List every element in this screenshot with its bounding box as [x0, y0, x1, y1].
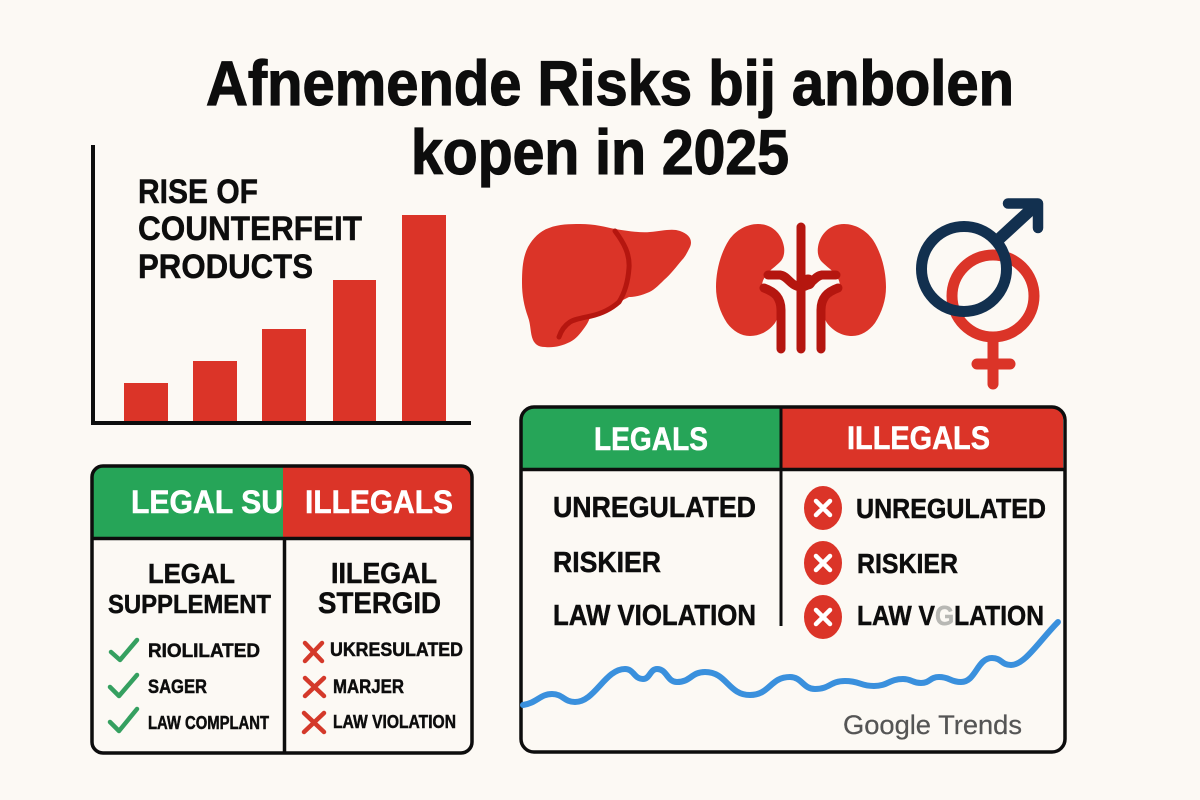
red header: [283, 467, 471, 538]
green header label: LEGALS: [594, 421, 708, 457]
panel frame: [521, 407, 1065, 752]
trend line: [523, 622, 1058, 705]
illegal column: LAW VIOLATION: [333, 712, 456, 732]
chart heading: RISE OF: [138, 173, 258, 211]
green header: [522, 408, 781, 469]
chart heading: [138, 173, 362, 286]
legal column: SAGER: [148, 677, 207, 698]
legal column list: LAW VIOLATION: [553, 600, 756, 632]
red header label: ILLEGALS: [305, 484, 453, 520]
red header: [781, 408, 1063, 469]
panel frame: [92, 466, 472, 753]
male symbol: [922, 204, 1038, 312]
legal column list: RISKIER: [553, 547, 661, 579]
green check marks: [110, 640, 137, 731]
legal column: LAW COMPLANT: [148, 713, 269, 733]
blood vessels and ureters: [764, 227, 838, 349]
illegal column list: RISKIER: [857, 548, 958, 579]
green header: [93, 467, 283, 538]
female symbol: [952, 255, 1034, 384]
liver lobe line: [559, 231, 629, 337]
illegal column: IILEGAL: [331, 558, 437, 590]
red cross marks: [304, 643, 324, 732]
panel: counterfeit bar chart: [93, 145, 471, 423]
trend source label: Google Trends: [843, 710, 1022, 740]
title: kopen in 2025: [411, 118, 789, 188]
chart heading: COUNTERFEIT: [138, 210, 362, 248]
legal column list: UNREGULATED: [553, 492, 756, 524]
title: [206, 49, 1014, 188]
chart bars: [124, 215, 446, 422]
icon: liver: [522, 224, 691, 347]
red header label: ILLEGALS: [847, 420, 990, 456]
chart axes: [93, 145, 471, 423]
green header label: LEGAL SU: [131, 484, 283, 520]
illegal column: [318, 558, 463, 732]
right kidney: [818, 224, 886, 336]
title: Afnemende Risks bij anbolen: [206, 49, 1014, 119]
icon: gender symbols: [922, 204, 1038, 384]
illegal column list: UNREGULATED: [856, 493, 1046, 524]
legal column: RIOLILATED: [148, 641, 260, 662]
legal column: SUPPLEMENT: [108, 589, 271, 619]
panel: legal supplement vs illegal steroid: [92, 466, 472, 753]
red cross badges: [804, 486, 842, 639]
legal column: [108, 558, 271, 733]
legal column list: [553, 492, 756, 632]
illegal column list: LAW VGLATION: [857, 600, 1044, 631]
illegal column list: [856, 493, 1046, 631]
illegal column: STERGID: [318, 587, 441, 620]
icon: kidneys: [716, 224, 886, 349]
illegal column: UKRESULATED: [330, 640, 463, 661]
legal column: LEGAL: [148, 558, 235, 589]
chart heading: PRODUCTS: [138, 248, 313, 286]
left kidney: [716, 224, 784, 336]
illegal column: MARJER: [333, 677, 404, 698]
panel: legals vs illegals with trend line: [521, 407, 1065, 752]
